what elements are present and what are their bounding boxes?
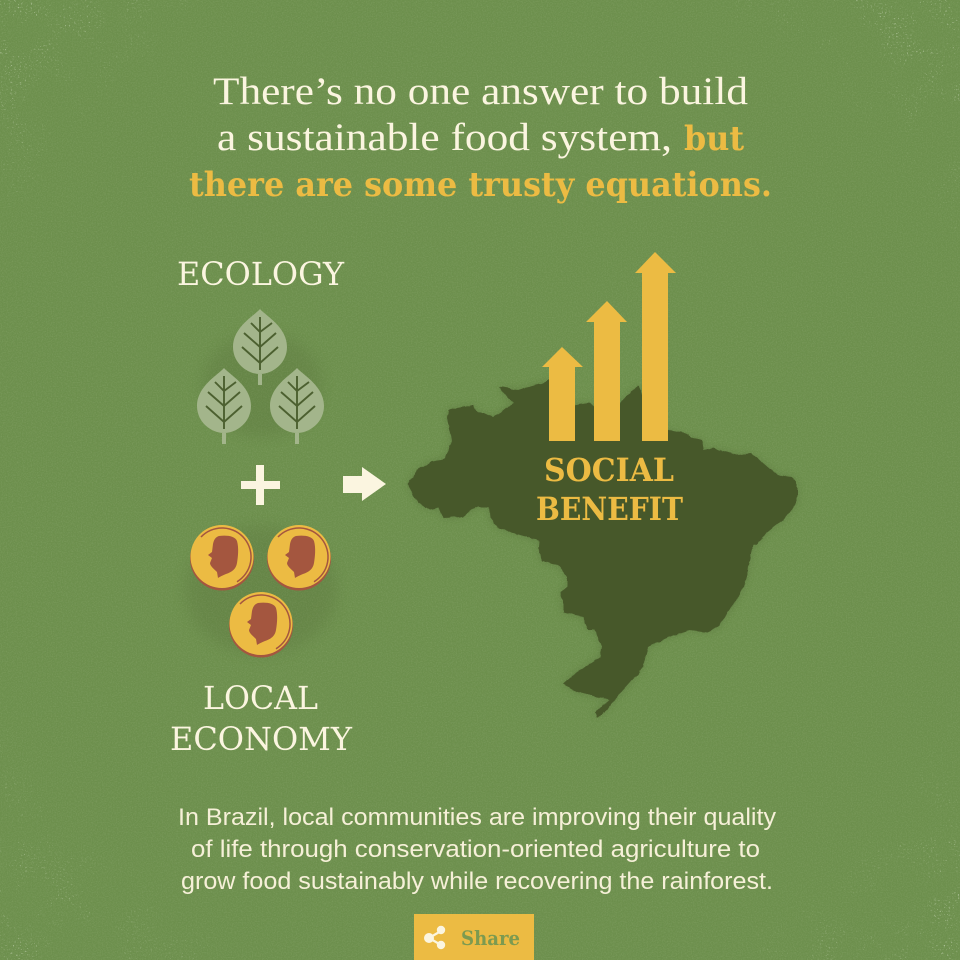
chart: three rising arrows (542, 252, 676, 441)
title: but (684, 119, 744, 159)
map: Brazil (408, 380, 797, 718)
label: local economy: ECONOMY (170, 720, 353, 758)
body text: In Brazil, local communities are improving their quality (178, 804, 776, 831)
label: social benefit: BENEFIT (536, 490, 683, 528)
label: social benefit (536, 451, 683, 528)
body text: of life through conservation-oriented agriculture to (191, 836, 760, 863)
label: social benefit: SOCIAL (544, 451, 674, 489)
title: There’s no one answer to build (213, 70, 749, 113)
label: local economy: LOCAL (203, 679, 318, 717)
title: there are some trusty equations. (189, 165, 772, 205)
icon: three leaves (197, 309, 324, 444)
label: ecology: ECOLOGY (177, 255, 345, 293)
icon: arrow to map (343, 467, 386, 501)
icon: three coins (185, 525, 337, 658)
body text: grow food sustainably while recovering the rainforest. (181, 868, 773, 895)
icon: plus (241, 465, 280, 505)
title: a sustainable food system, (217, 116, 672, 159)
body text (178, 804, 776, 895)
share button (414, 914, 534, 960)
label: local economy (170, 679, 353, 758)
title (189, 70, 772, 205)
share button: Share (461, 926, 520, 950)
icon: share (424, 926, 445, 949)
